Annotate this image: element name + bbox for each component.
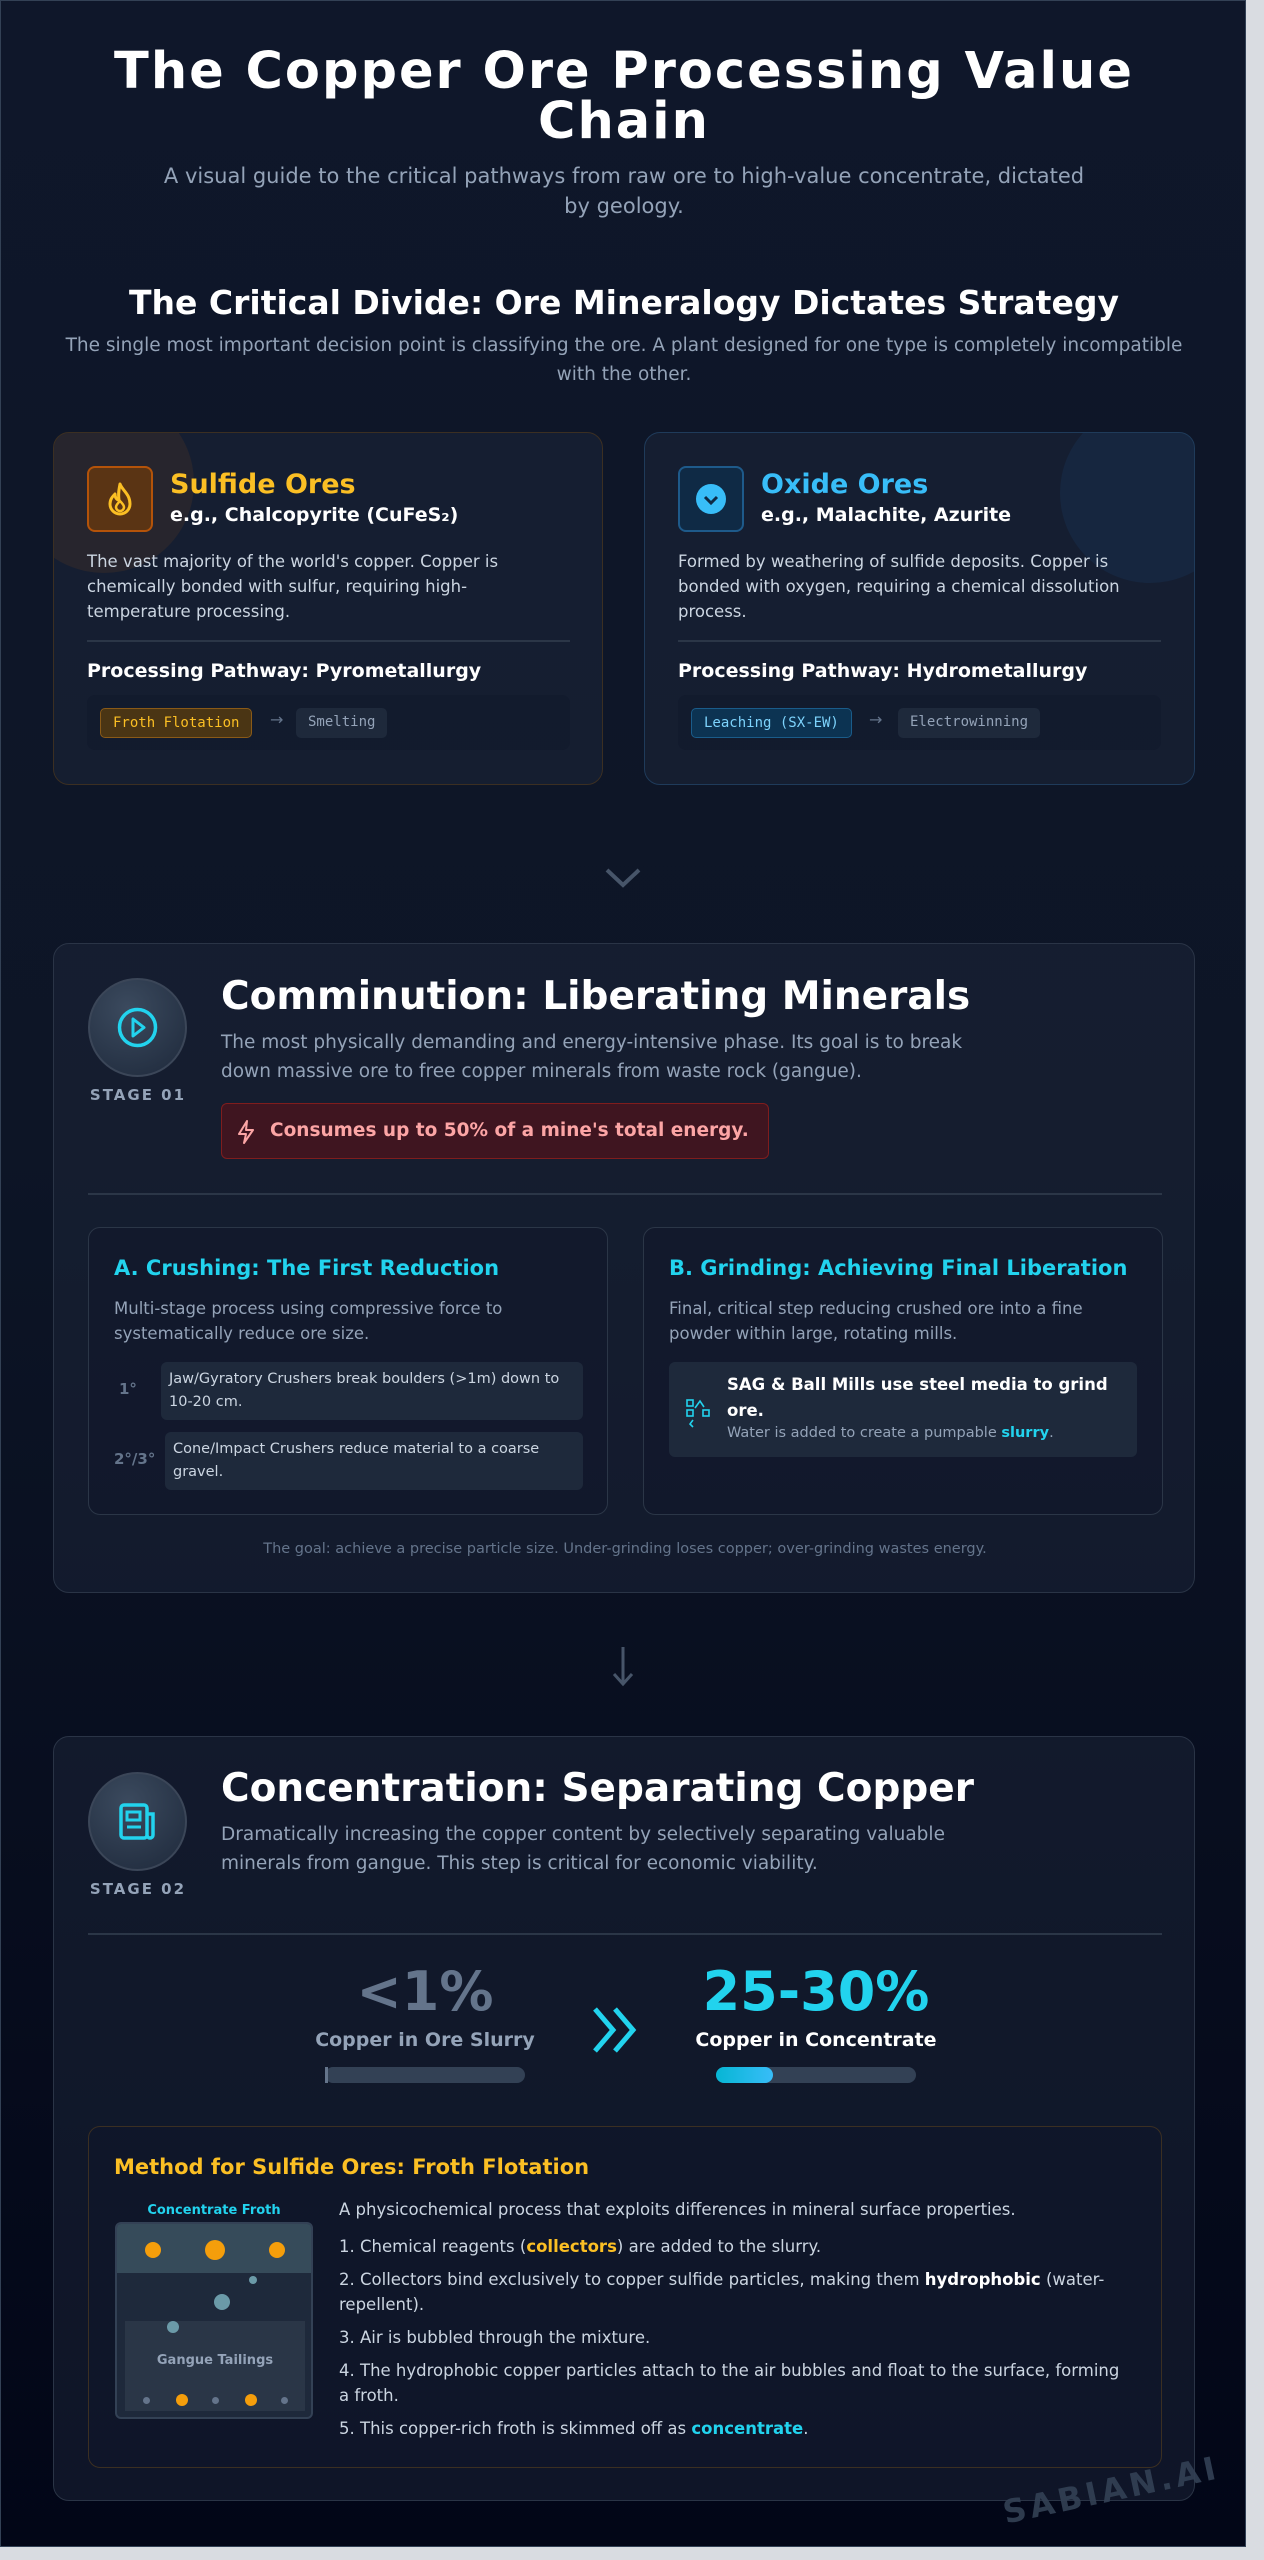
stat: ore slurry: <1% [357,1960,493,2023]
stat: concentrate: Copper in Concentrate [695,2029,937,2051]
text: flotation steps: 5. This copper-rich froth is skimmed off as concentrate. [339,2419,808,2438]
heading: froth flotation: Method for Sulfide Ores: Froth Flotation [114,2155,589,2179]
callout: mills [669,1362,1137,1457]
label: stage 02: STAGE 02 [90,1880,186,1898]
text: flotation steps [339,2200,1119,2438]
icon: oxide drop [678,466,744,532]
heading: grinding: B. Grinding: Achieving Final Liberation [669,1256,1127,1280]
icon: stage 01 play [88,978,187,1077]
subtitle: A visual guide to the critical pathways from raw ore to high-value concentrate, dictated [164,164,1084,188]
diagram: flotation cell [115,2203,313,2419]
panel: froth flotation [88,2126,1162,2468]
stat: ore slurry: Copper in Ore Slurry [315,2029,535,2051]
pathway: leaching to electrowinning: Leaching (SX-EW) [704,715,839,731]
label: stage 01: STAGE 01 [90,1086,186,1104]
text: comminution description: The most physically demanding and energy-intensive phase. Its goal is to break down massive ore to free copper minerals from waste rock (gangue). [221,1032,962,1082]
panel: oxide ores [644,432,1195,785]
title: The Copper Ore Processing Value [114,42,1134,101]
callout: mills: Water is added to create a pumpable slurry. [727,1425,1054,1441]
text: concentration description: Dramatically increasing the copper content by selectively separating valuable minerals from gangue. This step is critical for economic viability. [221,1824,945,1874]
stat: ore slurry [315,1960,535,2083]
text: flotation steps: 2. Collectors bind exclusively to copper sulfide particles, making them hydrophobic (water-repellent). [339,2270,1104,2314]
text: oxide description: Formed by weathering of sulfide deposits. Copper is bonded with oxygen, requiring a chemical dissolution process. [678,552,1120,621]
icon: flame [87,466,153,532]
text: flotation steps: 3. Air is bubbled through the mixture. [339,2328,650,2347]
row: primary crushers: 1° [119,1380,137,1398]
panel: crushing [88,1227,608,1515]
text: grinding description: Final, critical step reducing crushed ore into a fine powder within large, rotating mills. [669,1299,1083,1343]
text: flotation steps: A physicochemical process that exploits differences in mineral surface properties. [339,2200,1016,2219]
row: primary crushers: Jaw/Gyratory Crushers break boulders (>1m) down to 10-20 cm. [169,1371,559,1410]
callout: mills: SAG & Ball Mills use steel media to grind ore. [727,1375,1108,1420]
watermark: SABIAN.AI [999,2448,1223,2532]
subheading: chalcopyrite: e.g., Chalcopyrite (CuFeS₂) [170,504,458,526]
text: flotation steps: 1. Chemical reagents (collectors) are added to the slurry. [339,2237,821,2256]
arrow: chevron down [606,868,640,888]
heading: hydrometallurgy: Processing Pathway: Hydrometallurgy [678,660,1087,682]
pathway: leaching to electrowinning: Electrowinning [910,714,1028,730]
heading: oxide ores: Oxide Ores [761,469,928,500]
stat: concentrate: 25-30% [703,1960,929,2023]
row: secondary crushers [114,1432,583,1490]
icon: double chevron [593,2007,636,2053]
pathway: froth flotation to smelting: → [270,710,283,729]
heading: critical divide: The Critical Divide: Ore Mineralogy Dictates Strategy [129,283,1119,322]
arrow: down [613,1647,633,1686]
text: goal note: The goal: achieve a precise particle size. Under-grinding loses copper; over-grinding wastes energy. [263,1541,987,1557]
subtitle [164,164,1084,218]
callout: energy: Consumes up to 50% of a mine's total energy. [270,1120,749,1141]
row: primary crushers [119,1362,583,1420]
subtitle: by geology. [564,194,684,218]
diagram: flotation cell: Gangue Tailings [157,2353,273,2368]
panel: grinding [643,1227,1163,1515]
heading: comminution: Comminution: Liberating Minerals [221,974,970,1019]
subtext: critical divide [66,335,1182,385]
subheading: malachite: e.g., Malachite, Azurite [761,504,1011,526]
title [114,42,1134,151]
text: sulfide description: The vast majority of the world's copper. Copper is chemically bonded with sulfur, requiring high-temperature processing. [87,552,498,621]
text: crushing description: Multi-stage process using compressive force to systematically reduce ore size. [114,1299,502,1343]
pathway: froth flotation to smelting: Froth Flotation [113,715,239,731]
text: flotation steps: 4. The hydrophobic copper particles attach to the air bubbles and float to the surface, forming a froth. [339,2361,1119,2405]
heading: pyrometallurgy: Processing Pathway: Pyrometallurgy [87,660,481,682]
subtext: critical divide: The single most important decision point is classifying the ore. A plant designed for one type is completely incompatible [66,335,1182,356]
icon: mill [686,1399,710,1428]
heading: sulfide ores: Sulfide Ores [170,469,356,500]
subtext: critical divide: with the other. [557,364,691,385]
pathway: leaching to electrowinning [678,695,1161,750]
panel: stage 02 concentration [53,1736,1195,2501]
row: secondary crushers: 2°/3° [114,1450,155,1468]
callout: energy [221,1103,769,1159]
panel: stage 01 comminution [53,943,1195,1593]
row: secondary crushers: Cone/Impact Crushers reduce material to a coarse gravel. [173,1441,539,1480]
heading: crushing: A. Crushing: The First Reduction [114,1256,499,1280]
stat: concentrate [695,1960,937,2083]
title: Chain [538,92,710,151]
pathway: leaching to electrowinning: → [869,710,882,729]
icon: stage 02 [88,1772,187,1871]
pathway: froth flotation to smelting: Smelting [308,714,375,730]
heading: concentration: Concentration: Separating Copper [221,1766,974,1811]
diagram: flotation cell: Concentrate Froth [147,2203,281,2218]
pathway: froth flotation to smelting [87,695,570,750]
panel: sulfide ores [53,432,603,785]
